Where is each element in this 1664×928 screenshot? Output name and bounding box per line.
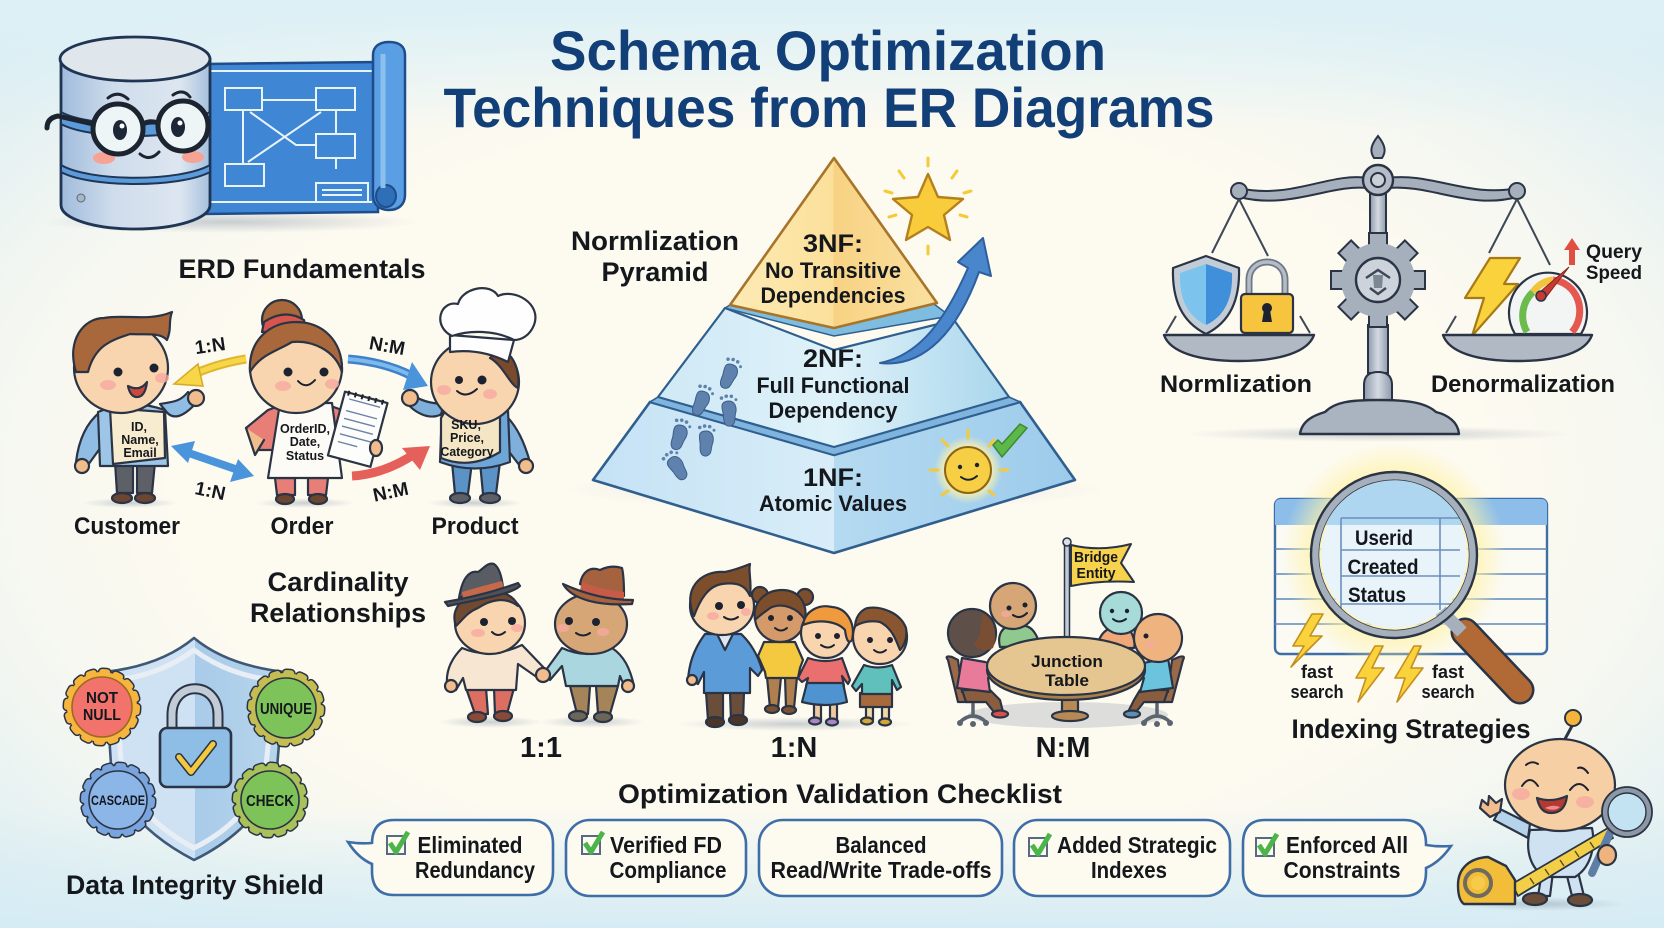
title: Schema Optimization xyxy=(550,19,1106,82)
balance structure xyxy=(1231,136,1525,434)
heading: Cardinality Relationships: Relationships xyxy=(250,598,426,628)
callout: query speed: Query xyxy=(1586,242,1642,263)
panel: ERD fundamentals entities xyxy=(73,288,535,540)
table xyxy=(1275,499,1547,654)
tier: 2NF xyxy=(658,308,1009,447)
label: fast search left: fast xyxy=(1301,662,1333,682)
heading: Data Integrity Shield: Data Integrity Shield xyxy=(66,870,324,900)
round table: Table xyxy=(1045,671,1089,690)
character: order: Date, xyxy=(290,435,320,449)
chart: normalization pyramid xyxy=(564,158,1104,553)
icon: smiling sun with check xyxy=(930,424,1027,504)
tier: 1NF xyxy=(593,397,1075,553)
heading: Cardinality Relationships xyxy=(250,567,426,628)
character: customer: Name, xyxy=(121,433,159,447)
label: fast search right: fast xyxy=(1432,662,1464,682)
label: 1:1: 1:1 xyxy=(520,732,562,764)
body and limbs xyxy=(1480,796,1593,906)
tape measure xyxy=(1458,828,1613,904)
chairs and wheels xyxy=(947,656,1184,727)
person left xyxy=(445,564,546,722)
arrow: customer to order 1:N xyxy=(171,441,254,505)
character: order: OrderID, xyxy=(280,422,330,436)
child girl yellow xyxy=(752,587,813,714)
arrow: order to customer 1:N: 1:N xyxy=(194,334,227,359)
heading: Normlization Pyramid: Pyramid xyxy=(602,257,708,287)
item: Enforced All Constraints xyxy=(1243,820,1451,896)
label: N:M: N:M xyxy=(1036,732,1090,764)
badge: CHECK: CHECK xyxy=(246,793,295,810)
tier: 3NF: No Transitive xyxy=(765,258,901,283)
item: Eliminated Redundancy: Eliminated xyxy=(418,832,522,858)
shield xyxy=(105,638,285,860)
icon: magnifier: Created xyxy=(1348,556,1418,579)
label: fast search right: search xyxy=(1422,682,1474,702)
illustration: robot mascot with magnifier and tape measure xyxy=(1455,710,1652,911)
tier: 2NF: 2NF: xyxy=(803,345,863,373)
item: Eliminated Redundancy xyxy=(348,820,553,895)
title xyxy=(444,19,1214,139)
icon: padlock xyxy=(160,689,231,787)
father xyxy=(687,564,762,727)
arrow: order to product N:M: N:M xyxy=(367,333,406,360)
label: Normlization: Normlization xyxy=(1160,371,1312,398)
head xyxy=(1505,739,1615,831)
panel: validation checklist xyxy=(348,820,1451,896)
badge: NOT NULL: NOT xyxy=(86,690,118,707)
icon: star xyxy=(885,158,971,254)
character: product chef xyxy=(402,288,535,508)
child boy teal xyxy=(852,608,907,726)
label: fast search left: search xyxy=(1290,682,1344,702)
tier: 2NF: Dependency xyxy=(768,398,898,423)
heading: ERD Fundamentals: ERD Fundamentals xyxy=(178,254,426,284)
round table xyxy=(987,637,1145,721)
flag: Entity xyxy=(1076,566,1116,582)
panel: normalization vs denormalization scale xyxy=(1160,136,1642,442)
item: Balanced Read/Write Trade-offs: Balanced xyxy=(836,832,926,858)
icon: magnifier xyxy=(1311,472,1520,690)
item: Balanced Read/Write Trade-offs xyxy=(759,820,1002,896)
item: Added Strategic Indexes: Added Strategic xyxy=(1057,832,1217,858)
illustration: one to many xyxy=(675,564,915,731)
arrow: order to product N:M red: N:M xyxy=(371,479,411,507)
badge: CHECK xyxy=(236,766,304,834)
label: Product: Product xyxy=(432,513,519,540)
item: Added Strategic Indexes xyxy=(1014,820,1230,896)
tier: 1NF: Atomic Values xyxy=(759,491,907,516)
tan person green shirt xyxy=(990,583,1038,647)
icon: footprints xyxy=(660,356,744,482)
badge: NOT NULL: NULL xyxy=(83,707,121,724)
teal person orange shirt xyxy=(1098,592,1142,648)
notepad xyxy=(328,390,388,467)
item: Verified FD Compliance: Verified FD xyxy=(610,832,722,858)
item: Added Strategic Indexes: Indexes xyxy=(1091,857,1167,883)
item: Verified FD Compliance: Compliance xyxy=(610,857,726,883)
title: Techniques from ER Diagrams xyxy=(444,76,1214,139)
badge: CASCADE: CASCADE xyxy=(91,792,145,808)
right pan: denormalization xyxy=(1443,199,1592,361)
item: Verified FD Compliance xyxy=(566,820,746,896)
character: product chef: Price, xyxy=(450,431,484,445)
label: Order: Order xyxy=(270,513,334,540)
character: customer: ID, xyxy=(131,420,147,434)
arrow: customer to order 1:N: 1:N xyxy=(193,478,227,505)
blueprint scroll xyxy=(205,42,405,214)
magnifier xyxy=(1592,787,1652,873)
label: Customer: Customer xyxy=(74,513,180,540)
icon: gear xyxy=(1331,233,1425,327)
flag: Bridge xyxy=(1074,550,1118,566)
arrow: order to customer 1:N xyxy=(174,334,246,386)
label: Denormalization: Denormalization xyxy=(1431,371,1615,398)
heading: Indexing Strategies: Indexing Strategies xyxy=(1292,714,1530,744)
callout: query speed xyxy=(1564,238,1642,284)
heading: Optimization Validation Checklist: Optimization Validation Checklist xyxy=(618,779,1062,809)
glow xyxy=(1282,443,1506,667)
heading: Normlization Pyramid xyxy=(571,226,739,287)
badge: UNIQUE: UNIQUE xyxy=(260,701,312,718)
arrow: upward progress xyxy=(880,238,991,363)
arrow: order to product N:M xyxy=(348,333,428,390)
flag xyxy=(1063,538,1134,650)
item: Enforced All Constraints: Constraints xyxy=(1284,857,1400,883)
character: product chef: Category xyxy=(440,445,494,459)
callout: query speed: Speed xyxy=(1586,263,1642,284)
badge: CASCADE xyxy=(84,766,152,834)
item: Balanced Read/Write Trade-offs: Read/Write Trade-offs xyxy=(770,857,992,883)
left pan: normalization xyxy=(1164,199,1314,361)
tier: 3NF: Dependencies xyxy=(760,283,906,308)
label: fast search right xyxy=(1422,662,1474,702)
label: 1:N: 1:N xyxy=(771,732,817,764)
tier: 1NF: 1NF: xyxy=(803,464,863,492)
seated people xyxy=(947,583,1184,727)
icon: magnifier: Status xyxy=(1348,584,1406,607)
item: Eliminated Redundancy: Redundancy xyxy=(415,857,535,883)
character: customer: Email xyxy=(123,446,157,460)
icon: database mascot with blueprint xyxy=(40,37,420,233)
icon: magnifier: Userid xyxy=(1355,527,1413,550)
database cylinder xyxy=(47,37,210,229)
icon: speed bolts xyxy=(1291,614,1423,702)
badge: UNIQUE xyxy=(251,673,321,743)
character: product chef: SKU, xyxy=(451,418,481,432)
tier: 3NF xyxy=(725,158,950,336)
panel: data integrity shield xyxy=(67,638,321,860)
tier: 3NF: 3NF: xyxy=(803,230,863,258)
label: fast search left xyxy=(1290,662,1344,702)
character: order xyxy=(246,300,388,508)
dark person pink shirt xyxy=(948,609,1008,718)
orange person blue shirt xyxy=(1124,614,1182,718)
panel: indexing strategies xyxy=(1275,443,1547,702)
badge: NOT NULL xyxy=(67,672,137,742)
child blonde pink xyxy=(798,606,853,726)
person right xyxy=(536,567,634,722)
heading: Cardinality Relationships: Cardinality xyxy=(268,567,408,597)
item: Enforced All Constraints: Enforced All xyxy=(1286,832,1408,858)
heading: Normlization Pyramid: Normlization xyxy=(571,226,739,256)
character: customer xyxy=(73,312,204,508)
character: order: Status xyxy=(286,449,324,463)
illustration: one to one xyxy=(438,564,644,728)
arrow: order to product N:M red xyxy=(352,446,430,507)
tier: 2NF: Full Functional xyxy=(756,373,910,398)
illustration: many to many junction table xyxy=(947,538,1184,728)
round table: Junction xyxy=(1031,652,1103,671)
